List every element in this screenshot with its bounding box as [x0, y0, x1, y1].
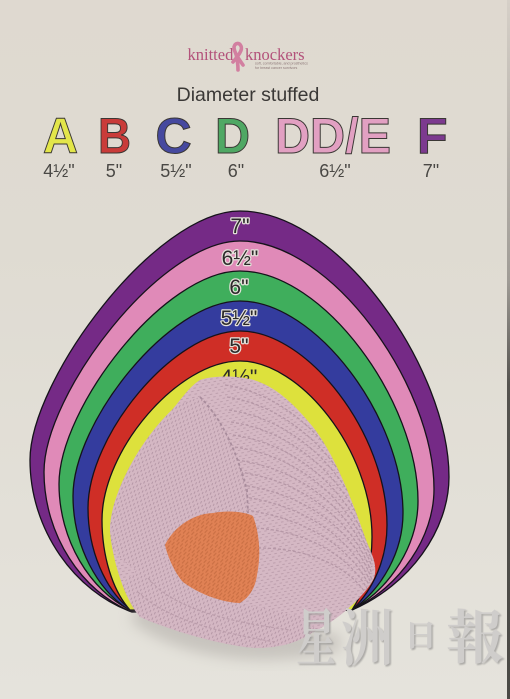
watermark characters: [296, 589, 504, 678]
cup B: B: [98, 108, 131, 164]
logo tagline: for breast cancer survivors: [255, 66, 298, 70]
band rib lines: [138, 578, 290, 642]
label 4.5 inch: 4½": [221, 366, 257, 389]
watermark shadow: 日: [406, 614, 438, 657]
cup F: F: [417, 108, 448, 164]
knitted breast form: [105, 376, 375, 660]
band: 4.5 inch: [102, 361, 372, 610]
watermark shadow: 洲: [342, 591, 394, 680]
concentric size chart: [30, 211, 449, 612]
seam line: [200, 397, 248, 513]
watermark shadow: [298, 590, 506, 680]
label 6.5 inch: 6½": [222, 247, 258, 270]
diameter B: 5": [106, 161, 122, 181]
legend: diameters: [43, 161, 439, 181]
stitch rows and panels: [105, 385, 372, 660]
logo wordmark left: knitted: [188, 45, 234, 64]
logo: knitted knockers: [188, 43, 308, 70]
band labels: [221, 215, 258, 389]
diameter A: 4½": [43, 161, 75, 181]
label 5 inch: 5": [229, 335, 249, 358]
icon: pink ribbon: [233, 43, 243, 70]
cup DD/E: DD/E: [275, 108, 391, 164]
knit body: [110, 376, 375, 648]
cup C: C: [156, 108, 192, 164]
shadow under knitted form: [130, 605, 340, 660]
label 7 inch: 7": [230, 215, 250, 238]
dark right edge of board: [507, 0, 510, 699]
heading: Diameter stuffed: [177, 84, 319, 106]
watermark shadow: 星: [298, 590, 337, 679]
band: 7 inch: [30, 211, 449, 612]
diameter D: 6": [228, 161, 244, 181]
diameter F: 7": [423, 161, 439, 181]
watermark shadow: 報: [448, 592, 506, 676]
knit band: [122, 550, 316, 648]
band: 6.5 inch: [44, 241, 434, 612]
diameter DD/E: 6½": [319, 161, 351, 181]
diameter C: 5½": [160, 161, 192, 181]
band: 6 inch: [59, 271, 418, 611]
watermark characters: 洲: [341, 590, 393, 678]
logo tagline: soft, comfortable, and prosthetics: [255, 62, 308, 66]
legend: cup sizes: [43, 108, 448, 164]
logo tagline: [255, 62, 308, 70]
watermark: publisher name: [296, 589, 506, 680]
band: 5.5 inch: [73, 301, 403, 611]
logo wordmark right: knockers: [245, 45, 305, 64]
areola: [165, 512, 259, 603]
label 5.5 inch: 5½": [221, 307, 257, 330]
cup D: D: [215, 108, 250, 164]
watermark characters: 報: [446, 591, 504, 675]
left knit panel: [105, 397, 248, 570]
right panel stitch rows: [225, 385, 372, 605]
band: 5 inch: [88, 331, 387, 610]
label 6 inch: 6": [229, 276, 249, 299]
watermark characters: 星: [296, 589, 336, 678]
watermark characters: 日: [404, 613, 437, 656]
cup A: A: [43, 108, 78, 164]
